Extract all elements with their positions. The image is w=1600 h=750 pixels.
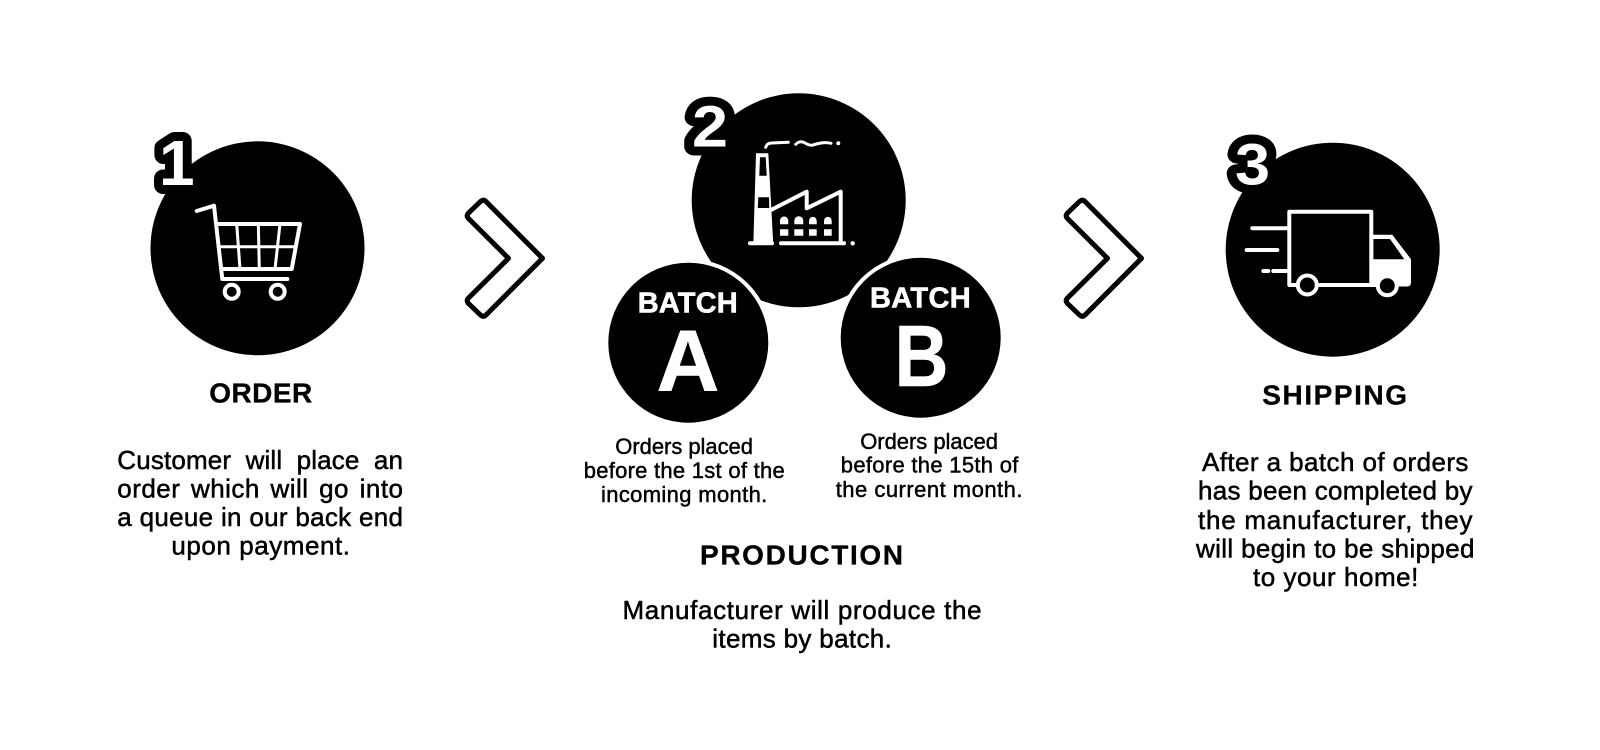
text: batch A note [584, 434, 785, 507]
text: shipping description [1195, 447, 1474, 592]
number 2: 2 [692, 95, 728, 160]
circle: production [692, 93, 906, 307]
circle: batch B: B [894, 308, 948, 405]
text: order description: a queue in our back end [117, 502, 403, 532]
text: order description: order which will go into [117, 474, 403, 504]
heading: order: ORDER [209, 378, 312, 408]
circle: batch B: BATCH [870, 282, 971, 314]
arrow: order to production [467, 200, 542, 316]
text: shipping description: has been completed by [1198, 476, 1472, 506]
panel: step 1 order [117, 127, 403, 560]
circle: batch A [604, 259, 772, 427]
text: batch B note [836, 429, 1022, 502]
circle: batch B [837, 254, 1005, 422]
text: batch A note: Orders placed [615, 434, 753, 459]
heading: production: PRODUCTION [700, 540, 903, 570]
panel: step 3 shipping [1195, 132, 1474, 592]
text: production description: Manufacturer will produce the [622, 595, 982, 625]
circle: batch A: BATCH [638, 288, 738, 320]
text: order description: upon payment. [171, 530, 350, 560]
text: shipping description: to your home! [1253, 562, 1418, 592]
number 3: 3 [1235, 132, 1270, 197]
text: production description [622, 595, 982, 654]
icon: shopping cart [197, 206, 300, 299]
text: shipping description: will begin to be shipped [1195, 534, 1474, 564]
text: order description: Customer will place an [117, 445, 403, 475]
text: order description [117, 445, 403, 560]
number 1: 1 [159, 127, 195, 199]
text: batch A note: incoming month. [601, 482, 767, 507]
text: shipping description: the manufacturer, they [1198, 505, 1472, 535]
circle: order [150, 141, 364, 355]
heading: shipping: SHIPPING [1262, 380, 1407, 410]
text: batch B note: before the 15th of [841, 452, 1019, 478]
icon: delivery truck [1247, 212, 1411, 295]
text: batch B note: Orders placed [860, 429, 998, 454]
arrow: production to shipping [1066, 200, 1142, 316]
icon: factory [750, 141, 855, 246]
circle: shipping [1226, 143, 1440, 357]
panel: step 2 production [584, 93, 1022, 654]
text: production description: items by batch. [712, 624, 892, 654]
text: batch B note: the current month. [836, 477, 1022, 502]
text: shipping description: After a batch of orders [1202, 447, 1468, 477]
text: batch A note: before the 1st of the [584, 458, 785, 483]
circle: batch A: A [656, 313, 719, 410]
